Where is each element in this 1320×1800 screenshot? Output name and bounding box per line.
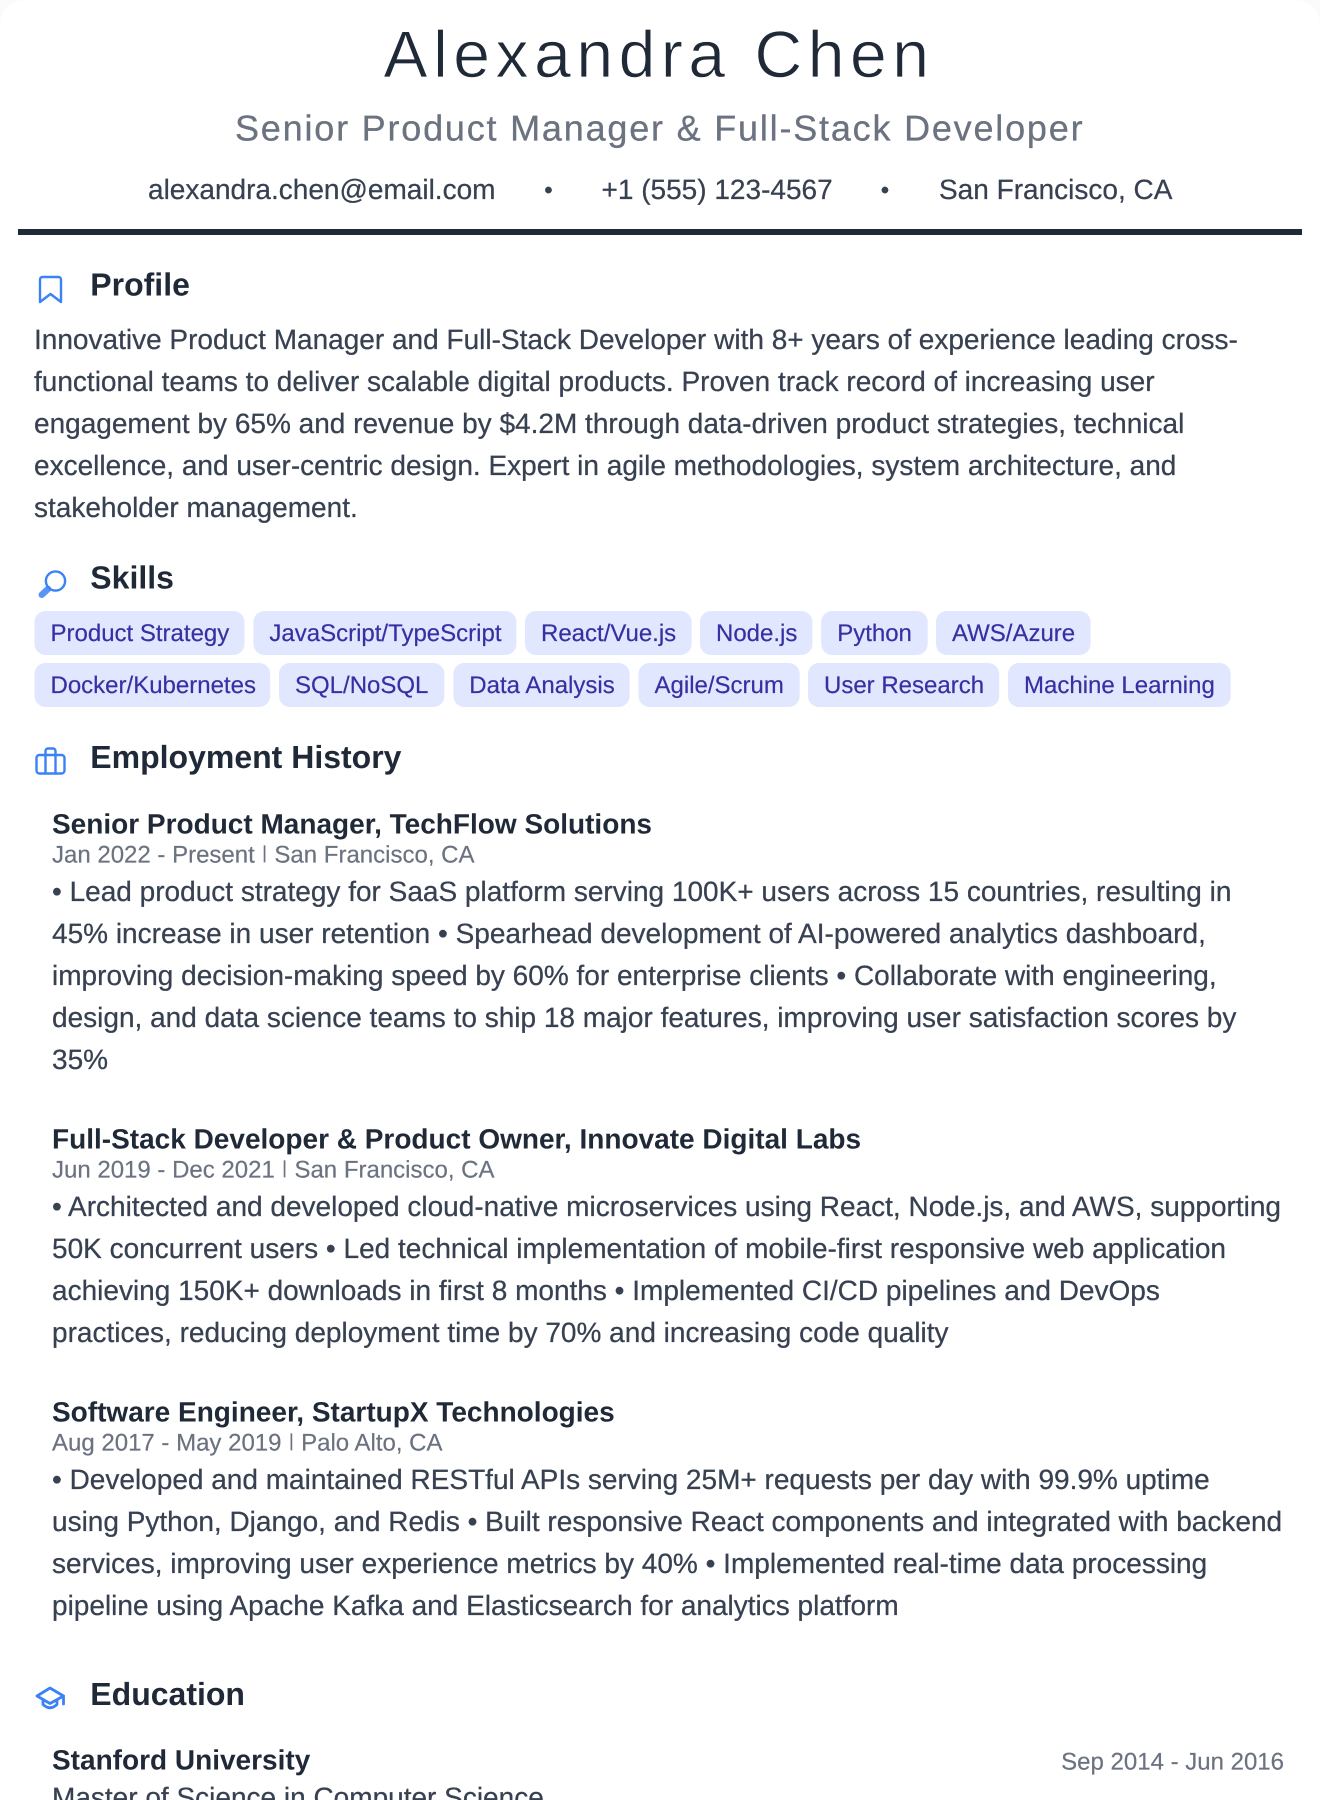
section: employment history: [36, 739, 1282, 1621]
job: innovate digital labs: achieving 150K+ downloads in first 8 months • Implemented CI/CD pipelines and DevOps: [52, 1275, 1160, 1306]
skill tags: JavaScript/TypeScript: [269, 620, 502, 647]
section: skills: [34, 560, 1231, 707]
job: innovate digital labs: Full-Stack Developer & Product Owner, Innovate Digital Labs: [52, 1123, 861, 1154]
skill tags: Python: [837, 620, 912, 647]
skill tags: SQL/NoSQL: [295, 672, 428, 699]
name title: Alexandra Chen: [384, 17, 935, 91]
heading: employment history: Employment History: [90, 739, 402, 775]
skill tags: Node.js: [716, 620, 797, 647]
job subtitle: Senior Product Manager & Full-Stack Developer: [235, 108, 1084, 148]
job: techflow: San Francisco, CA: [268, 841, 475, 868]
job: innovate digital labs: Jun 2019 - Dec 2021: [52, 1156, 275, 1183]
job: innovate digital labs: San Francisco, CA: [288, 1156, 495, 1183]
job: startupx: using Python, Django, and Redis • Built responsive React components and integrated with backend: [52, 1506, 1282, 1537]
profile text: Innovative Product Manager and Full-Stack Developer with 8+ years of experience leading cross-: [34, 324, 1238, 355]
entry: stanford: [52, 1744, 1284, 1800]
heading: profile: Profile: [90, 266, 190, 302]
profile text: excellence, and user-centric design. Expert in agile methodologies, system architecture, and: [34, 450, 1176, 481]
job: techflow: 45% increase in user retention • Spearhead development of AI-powered analytics dashboard,: [52, 918, 1206, 949]
contact line: [148, 174, 1173, 205]
skill tags: Machine Learning: [1024, 672, 1215, 699]
profile text: engagement by 65% and revenue by $4.2M through data-driven product strategies, technical: [34, 408, 1184, 439]
icon: magnifier: [42, 571, 65, 595]
skill tags: Agile/Scrum: [654, 672, 784, 699]
profile text: stakeholder management.: [34, 492, 358, 523]
skill tags: React/Vue.js: [541, 620, 676, 647]
entry: stanford: Sep 2014 - Jun 2016: [1061, 1748, 1284, 1775]
job: techflow: Senior Product Manager, TechFlow Solutions: [52, 808, 652, 839]
contact line: •: [881, 177, 889, 204]
skill tags: User Research: [824, 672, 984, 699]
heading: skills: Skills: [90, 560, 174, 596]
job: startupx: Software Engineer, StartupX Technologies: [52, 1396, 615, 1427]
job: techflow: improving decision-making speed by 60% for enterprise clients • Collaborate with engineering,: [52, 960, 1217, 991]
profile text: [34, 324, 1238, 523]
contact line: San Francisco, CA: [939, 174, 1173, 205]
job: startupx: pipeline using Apache Kafka and Elasticsearch for analytics platform: [52, 1590, 899, 1621]
skill tags: [34, 611, 1231, 707]
job: startupx: Aug 2017 - May 2019: [52, 1429, 282, 1456]
job: innovate digital labs: |: [282, 1158, 287, 1178]
contact line: •: [544, 177, 553, 204]
job: techflow: |: [262, 842, 267, 862]
icon: briefcase: [36, 748, 64, 774]
job: startupx: Palo Alto, CA: [294, 1429, 443, 1456]
header: [18, 17, 1302, 235]
skill tags: Product Strategy: [50, 620, 229, 647]
contact line: alexandra.chen@email.com: [148, 174, 495, 205]
job: innovate digital labs: • Architected and developed cloud-native microservices using React, Node.js, and AWS, supporting: [52, 1191, 1281, 1222]
section: profile: [34, 266, 1238, 523]
job: startupx: • Developed and maintained RESTful APIs serving 25M+ requests per day with 99.9% uptime: [52, 1464, 1210, 1495]
job: innovate digital labs: practices, reducing deployment time by 70% and increasing code quality: [52, 1317, 949, 1348]
job: techflow: [52, 808, 1236, 1075]
job: startupx: |: [289, 1430, 294, 1450]
heading: education: Education: [90, 1676, 245, 1712]
profile text: functional teams to deliver scalable digital products. Proven track record of increasing user: [34, 366, 1155, 397]
job: techflow: design, and data science teams to ship 18 major features, improving user satisfaction scores by: [52, 1002, 1236, 1033]
entry: stanford: Stanford University: [52, 1744, 311, 1775]
section: education: [37, 1676, 1284, 1800]
job: innovate digital labs: [52, 1123, 1281, 1348]
job: techflow: • Lead product strategy for SaaS platform serving 100K+ users across 15 countries, resulting in: [52, 876, 1231, 907]
job: startupx: [52, 1396, 1282, 1621]
job: techflow: 35%: [52, 1044, 108, 1075]
skill tags: Data Analysis: [469, 672, 615, 699]
job: innovate digital labs: 50K concurrent users • Led technical implementation of mobile-first responsive web application: [52, 1233, 1226, 1264]
job: techflow: Jan 2022 - Present: [52, 841, 255, 868]
skill tags: Docker/Kubernetes: [50, 672, 256, 699]
skill tags: AWS/Azure: [952, 620, 1075, 647]
job: startupx: services, improving user experience metrics by 40% • Implemented real-time data processing: [52, 1548, 1207, 1579]
icon: graduation cap: [37, 1688, 64, 1708]
contact line: +1 (555) 123-4567: [602, 174, 833, 205]
icon: bookmark: [40, 277, 61, 302]
